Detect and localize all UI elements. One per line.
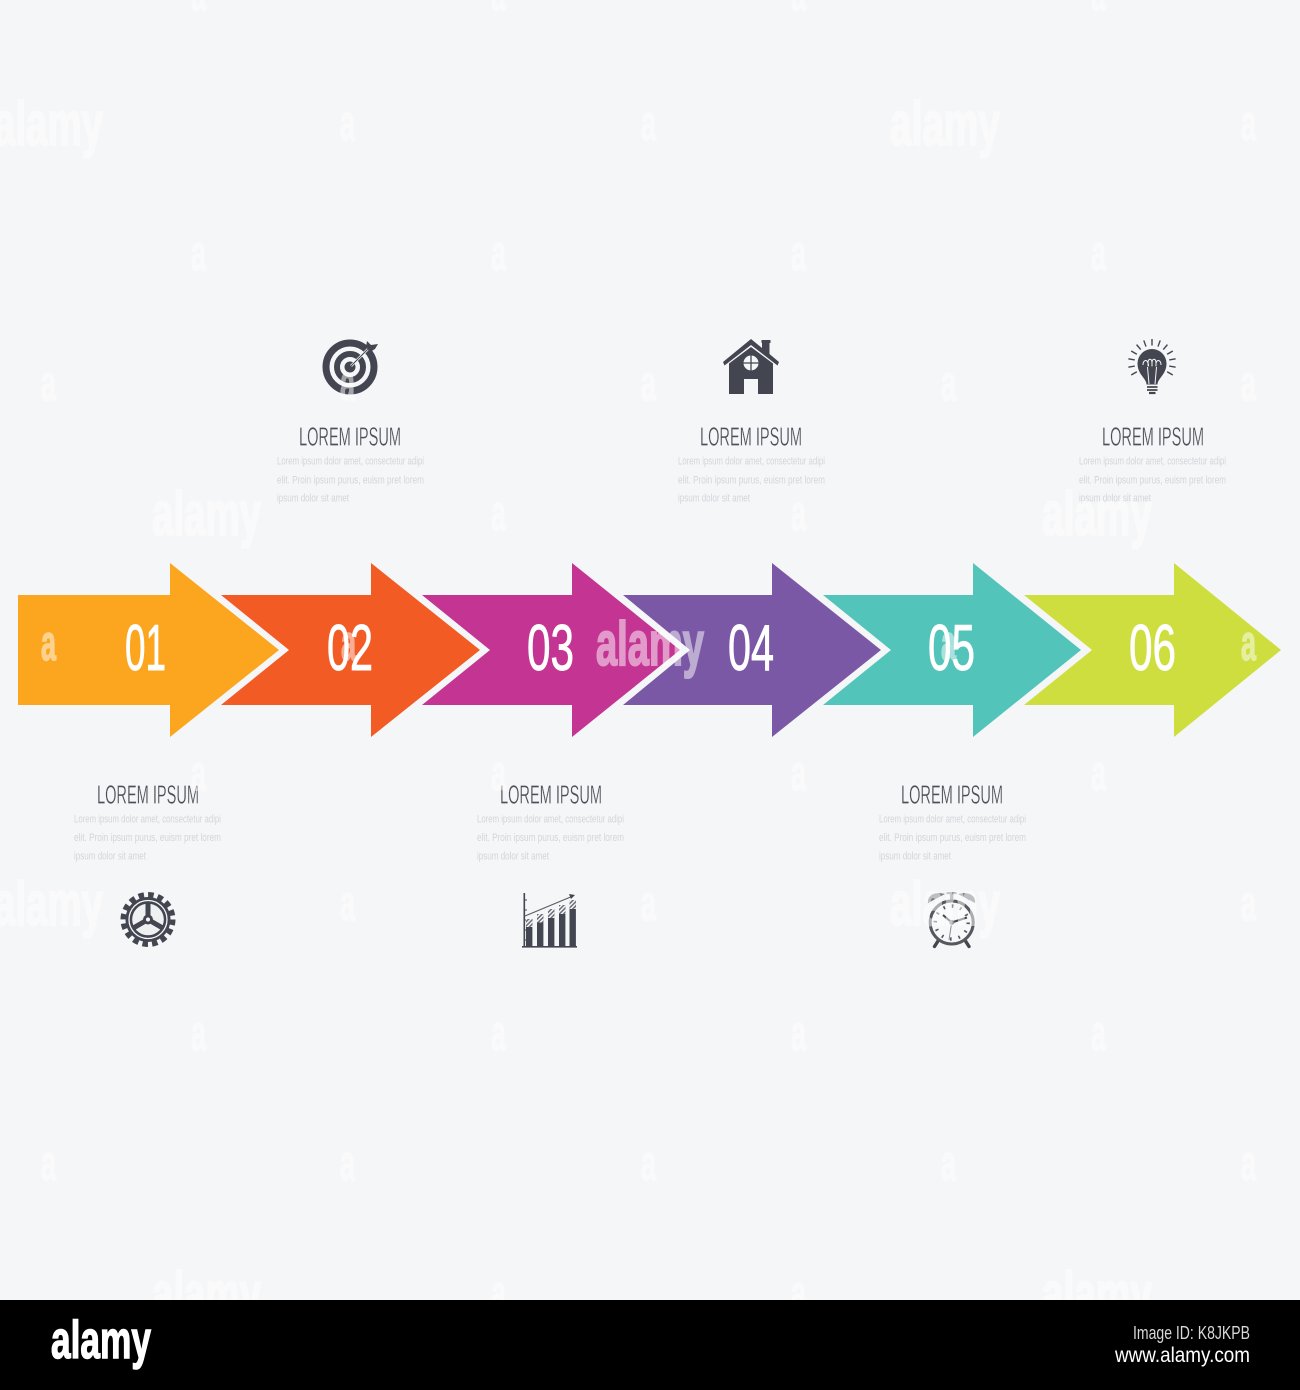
watermarks: a (191, 1005, 207, 1061)
watermarks: a (41, 615, 57, 671)
text block: step 5 (879, 780, 1026, 862)
watermarks: a (1091, 225, 1107, 281)
arrow 4: 04 (728, 611, 774, 684)
text block: step 3: LOREM IPSUM (500, 780, 602, 810)
text block: step 2: elit. Proin ipsum purus, euism pret lorem (277, 474, 424, 486)
text block: step 6: LOREM IPSUM (1102, 422, 1204, 452)
watermarks: a (491, 1005, 507, 1061)
arrow 5 (823, 563, 1081, 737)
watermarks: a (1241, 95, 1257, 151)
watermarks: a (491, 745, 507, 801)
text block: step 4: Lorem ipsum dolor amet, consectetur adipi (678, 456, 825, 468)
watermarks: a (641, 355, 657, 411)
footer website: www.alamy.com (1114, 1344, 1250, 1367)
watermarks: alamy (152, 480, 261, 549)
footer bar (0, 1300, 1300, 1390)
text block: step 5: LOREM IPSUM (901, 780, 1003, 810)
arrow 1: 01 (125, 611, 166, 684)
text block: step 1: Lorem ipsum dolor amet, consectetur adipi (74, 814, 221, 826)
watermarks: a (491, 485, 507, 541)
text block: step 6 (1079, 422, 1226, 504)
watermarks: a (1241, 355, 1257, 411)
text block: step 6: ipsum dolor sit amet (1079, 492, 1151, 504)
watermarks: a (341, 615, 357, 671)
watermarks: a (941, 615, 957, 671)
text block: step 2: Lorem ipsum dolor amet, consectetur adipi (277, 456, 424, 468)
arrow 2 (221, 563, 480, 737)
text block: step 3: elit. Proin ipsum purus, euism pret lorem (477, 832, 624, 844)
text block: step 4: LOREM IPSUM (700, 422, 802, 452)
text block: step 2: LOREM IPSUM (299, 422, 401, 452)
icon: gear (124, 896, 172, 944)
watermarks: a (41, 1135, 57, 1191)
watermarks: a (191, 225, 207, 281)
text block: step 4: ipsum dolor sit amet (678, 492, 750, 504)
arrow 5: 05 (928, 611, 975, 684)
watermarks: a (941, 1135, 957, 1191)
watermarks: a (340, 1135, 356, 1191)
arrow 3 (422, 563, 680, 737)
watermarks: a (1091, 1005, 1107, 1061)
icon: light bulb (1128, 339, 1176, 393)
watermarks: alamy (596, 610, 704, 679)
watermarks: a (791, 1265, 807, 1321)
text block: step 1 (74, 780, 221, 862)
watermarks: a (641, 1135, 657, 1191)
icon: house (723, 339, 779, 394)
watermarks: a (191, 745, 207, 801)
arrow 6 (1024, 563, 1281, 737)
watermarks: a (791, 1005, 807, 1061)
text block: step 2: ipsum dolor sit amet (277, 492, 349, 504)
watermarks: a (641, 95, 657, 151)
icon: bar chart with arrow (522, 893, 577, 948)
watermarks: alamy (1042, 1260, 1152, 1329)
watermarks: alamy (152, 1260, 261, 1329)
watermarks: a (340, 875, 356, 931)
arrow 4 (623, 563, 881, 737)
watermarks: a (340, 355, 356, 411)
text block: step 3 (477, 780, 624, 862)
watermarks: a (491, 225, 507, 281)
watermarks: a (791, 225, 807, 281)
watermarks: alamy (890, 870, 1000, 939)
watermarks: a (1241, 875, 1257, 931)
icon: alarm clock (928, 892, 975, 946)
text block: step 5: elit. Proin ipsum purus, euism pret lorem (879, 832, 1026, 844)
watermarks: a (491, 1265, 507, 1321)
watermarks: alamy (1042, 480, 1152, 549)
text block: step 4: elit. Proin ipsum purus, euism pret lorem (678, 474, 825, 486)
text block: step 4 (678, 422, 825, 504)
watermarks: alamy (890, 90, 1000, 159)
watermarks: a (340, 95, 356, 151)
watermarks: a (1241, 615, 1257, 671)
watermarks: a (41, 355, 57, 411)
text block: step 5: ipsum dolor sit amet (879, 850, 951, 862)
text block: step 5: Lorem ipsum dolor amet, consectetur adipi (879, 814, 1026, 826)
text block: step 3: Lorem ipsum dolor amet, consectetur adipi (477, 814, 624, 826)
arrow 6: 06 (1129, 611, 1176, 684)
arrow 3: 03 (527, 611, 574, 684)
arrow timeline (18, 563, 1281, 737)
watermarks: a (791, 745, 807, 801)
text block: step 3: ipsum dolor sit amet (477, 850, 549, 862)
arrow 1 (18, 563, 279, 737)
icon: target with dart (326, 341, 378, 391)
footer image id: Image ID: K8JKPB (1133, 1323, 1250, 1343)
text block: step 1: elit. Proin ipsum purus, euism pret lorem (74, 832, 221, 844)
text block: step 1: LOREM IPSUM (97, 780, 199, 810)
text block: step 6: elit. Proin ipsum purus, euism pret lorem (1079, 474, 1226, 486)
watermarks: a (791, 485, 807, 541)
text block: step 6: Lorem ipsum dolor amet, consectetur adipi (1079, 456, 1226, 468)
text block: step 2 (277, 422, 424, 504)
watermarks: a (1091, 745, 1107, 801)
text block: step 1: ipsum dolor sit amet (74, 850, 146, 862)
watermarks: a (641, 875, 657, 931)
footer logo: alamy (51, 1311, 151, 1370)
watermarks: a (941, 355, 957, 411)
arrow 2: 02 (327, 611, 373, 684)
watermarks: a (1241, 1135, 1257, 1191)
